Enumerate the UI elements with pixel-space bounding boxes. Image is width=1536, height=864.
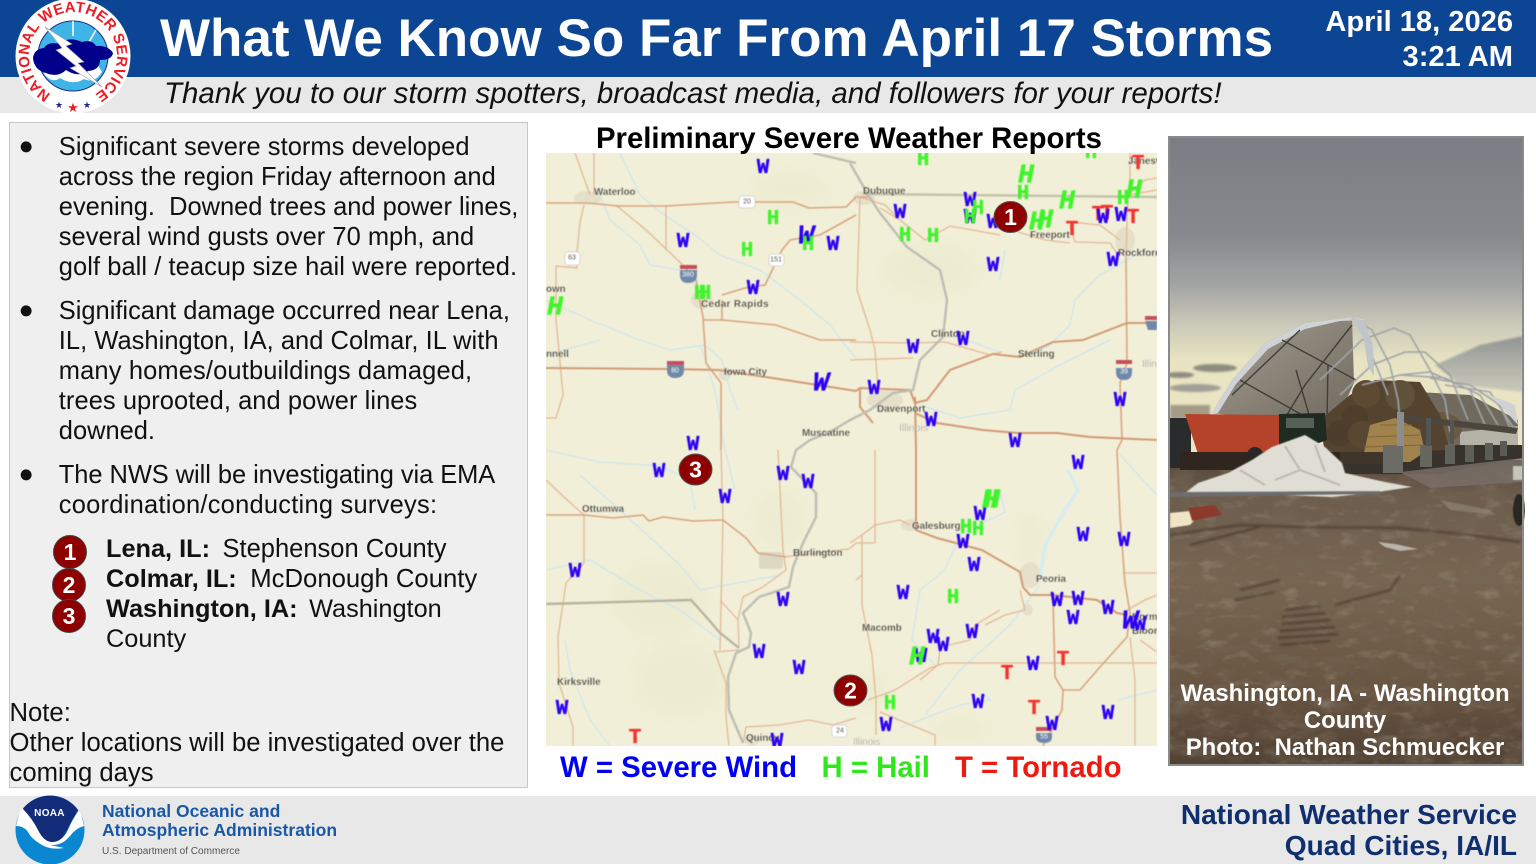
hail reports: H xyxy=(984,486,1001,516)
office name: National Weather Service xyxy=(1181,798,1517,830)
text: storm overview: golf ball / teacup size hail were reported. xyxy=(59,253,517,281)
wind reports: W xyxy=(1107,250,1120,273)
text: significant damage: downed. xyxy=(59,417,155,445)
survey marker 2: Colmar xyxy=(834,675,867,706)
wind reports: W xyxy=(1009,431,1022,454)
wind reports: W xyxy=(793,658,806,681)
map road shield labels: 24 xyxy=(836,728,844,734)
city labels: own xyxy=(546,284,566,295)
wind reports: W xyxy=(1077,525,1090,548)
icon: National Weather Service logo: ★ xyxy=(83,101,91,111)
map road shield labels: 380 xyxy=(682,272,694,278)
icon: NOAA logo: NOAA xyxy=(34,808,65,819)
wind reports xyxy=(556,157,1147,754)
hail reports: H xyxy=(972,519,984,542)
wind reports: W xyxy=(1114,390,1127,413)
wind reports drawn over tornado markers xyxy=(1097,205,1128,230)
barn base shadow xyxy=(1340,445,1523,474)
wind reports: W xyxy=(677,231,690,254)
map heading: Preliminary Severe Weather Reports xyxy=(596,122,1102,155)
wind reports: W xyxy=(1122,608,1141,638)
hail reports: H xyxy=(927,226,939,249)
text: significant damage: IL, Washington, IA, and Colmar, IL with xyxy=(59,327,499,355)
wind reports: W xyxy=(925,410,938,433)
photo caption: Washington, IA - Washington xyxy=(1180,680,1510,707)
wind reports: W xyxy=(868,378,881,401)
icon: National Weather Service logo: NATIONAL WEATHER SERVICE xyxy=(18,2,128,102)
icon: National Weather Service logo: ★ xyxy=(55,101,63,111)
bullet 3: ● xyxy=(18,460,34,488)
tornado reports: T xyxy=(1066,219,1078,242)
panel: key points: 3 xyxy=(62,602,75,628)
wind reports: W xyxy=(915,646,928,669)
wind reports: W xyxy=(897,583,910,606)
date and time: April 18, 2026 xyxy=(1325,6,1513,38)
hail reports: H xyxy=(960,517,972,540)
city labels: Quincy xyxy=(746,733,780,744)
panel: key points: 1 xyxy=(63,538,76,564)
photo: damaged hay barn in Washington County xyxy=(1168,136,1525,766)
wind reports: W xyxy=(747,278,760,301)
city labels: Waterloo xyxy=(594,187,636,198)
wind reports: W xyxy=(972,692,985,715)
sky clouds xyxy=(1166,336,1523,392)
office name: Quad Cities, IA/IL xyxy=(1285,830,1517,860)
city labels: Illin xyxy=(1142,359,1157,370)
city labels xyxy=(546,156,1164,748)
wind reports: W xyxy=(1102,598,1115,621)
note xyxy=(10,699,504,787)
barn rail and concrete bases xyxy=(1340,412,1518,473)
text: investigation: The NWS will be investigating via EMA xyxy=(59,461,495,489)
survey marker 3: Washington: 3 xyxy=(689,456,702,482)
city labels: Cedar Rapids xyxy=(701,299,769,310)
wind reports drawn over tornado markers: W xyxy=(1115,205,1128,228)
map road shield labels: 20 xyxy=(743,198,751,206)
hail reports: H xyxy=(1029,208,1046,238)
wind reports: W xyxy=(894,202,907,225)
tornado reports xyxy=(629,153,1144,750)
hail reports: H xyxy=(1117,188,1129,211)
wind reports: W xyxy=(927,627,940,650)
map road shield labels: 55 xyxy=(1040,734,1048,740)
wind reports: W xyxy=(1134,614,1147,637)
hail reports xyxy=(547,142,1143,716)
hail reports: H xyxy=(947,587,959,610)
NOAA agency name xyxy=(102,800,337,840)
wind reports: W xyxy=(1102,703,1115,726)
hail reports: H xyxy=(884,693,896,716)
text: storm overview: across the region Friday afternoon and xyxy=(59,163,496,191)
map road shield labels xyxy=(568,198,1128,740)
text: storm overview: evening. Downed trees and power lines, xyxy=(59,193,518,221)
survey marker 2: Colmar: 2 xyxy=(844,678,857,704)
panel: key points xyxy=(9,122,528,788)
survey list: County xyxy=(106,625,186,653)
wind reports: W xyxy=(966,622,979,645)
city labels: Sterling xyxy=(1018,349,1054,360)
map legend: W = Severe Wind H = Hail T = Tornado xyxy=(560,751,1122,784)
wind reports: W xyxy=(987,212,1000,235)
map road shield labels: 151 xyxy=(770,256,782,264)
wind reports: W xyxy=(987,255,1000,278)
text: storm overview xyxy=(59,133,518,281)
puddles and wheel xyxy=(1170,466,1525,551)
tornado reports: T xyxy=(1101,203,1113,226)
wind reports: W xyxy=(827,234,840,257)
wind reports: W xyxy=(1067,608,1080,631)
far-end fabric xyxy=(1485,393,1518,425)
footer band xyxy=(0,796,1536,864)
barn fabric panel xyxy=(1212,317,1354,425)
wind reports: W xyxy=(880,715,893,738)
wind reports: W xyxy=(1072,589,1085,612)
wind reports: W xyxy=(957,532,970,555)
city labels: Burlington xyxy=(793,548,843,559)
survey marker 3: Washington xyxy=(679,454,712,485)
city labels: Illinois xyxy=(899,422,928,434)
note: Other locations will be investigated over the xyxy=(10,729,504,757)
wind reports: W xyxy=(777,464,790,487)
wind reports: W xyxy=(687,434,700,457)
minor roads xyxy=(546,153,1157,746)
treeline xyxy=(1170,405,1210,419)
note: Note: xyxy=(10,699,71,727)
survey list xyxy=(106,535,478,653)
wind reports: W xyxy=(556,698,569,721)
ground xyxy=(1169,460,1523,764)
bullet 1: ● xyxy=(18,132,34,160)
department of commerce line: U.S. Department of Commerce xyxy=(102,846,240,856)
hail reports: H xyxy=(1126,176,1143,206)
text: significant damage xyxy=(59,297,510,445)
map road shield labels: 63 xyxy=(568,254,576,262)
subtitle: Thank you to our storm spotters, broadcast media, and followers for your reports! xyxy=(164,77,1222,110)
photo caption: County xyxy=(1304,707,1386,734)
title: What We Know So Far From April 17 Storms xyxy=(160,9,1273,68)
header band xyxy=(0,0,1536,77)
city labels: Clinton xyxy=(931,329,965,340)
icon: NOAA logo xyxy=(16,796,84,864)
date and time xyxy=(1325,6,1513,73)
urban areas xyxy=(574,191,1135,746)
survey number markers xyxy=(52,535,87,633)
wind reports: W xyxy=(937,635,950,658)
city labels: Freeport xyxy=(1030,230,1070,241)
interstate shields xyxy=(667,265,1157,743)
survey marker 1: Lena: 1 xyxy=(1004,204,1017,230)
office name xyxy=(1181,798,1517,860)
hail reports: H xyxy=(547,294,564,324)
text: storm overview: Significant severe storms developed xyxy=(59,133,470,161)
tire tracks xyxy=(1170,525,1520,645)
wind reports: W xyxy=(968,555,981,578)
wind reports: W xyxy=(974,504,987,527)
wind reports: W xyxy=(777,590,790,613)
wind reports: W xyxy=(569,561,582,584)
city labels: Ottumwa xyxy=(582,504,624,515)
wind reports: W xyxy=(802,472,815,495)
hail reports: H xyxy=(699,283,711,306)
hail reports: H xyxy=(802,234,814,257)
survey list: Lena, IL: Stephenson County xyxy=(106,535,447,563)
hail reports: H xyxy=(1059,188,1076,218)
text: significant damage: Significant damage occurred near Lena, xyxy=(59,297,510,325)
wind reports: W xyxy=(957,329,970,352)
tornado reports: T xyxy=(1057,649,1069,672)
map road shield labels: 39 xyxy=(1120,368,1128,376)
photo caption xyxy=(1180,680,1510,761)
hail reports: H xyxy=(767,208,779,231)
hay bales xyxy=(1320,380,1450,462)
tornado reports: T xyxy=(1127,207,1139,230)
hail reports: H xyxy=(982,486,999,516)
text: significant damage: many homes/outbuildings damaged, xyxy=(59,357,472,385)
wind reports: W xyxy=(1051,590,1064,613)
wind reports: W xyxy=(1046,714,1059,737)
wind reports: W xyxy=(1118,530,1131,553)
tornado reports: T xyxy=(1028,698,1040,721)
red feed wagon and tractor xyxy=(1169,413,1340,470)
wind reports: W xyxy=(1072,453,1085,476)
NOAA agency name: Atmospheric Administration xyxy=(102,820,337,840)
bullet 2: ● xyxy=(18,296,34,324)
city labels: Davenport xyxy=(877,404,926,415)
panel: key points: 2 xyxy=(62,572,75,598)
city labels: Kirksville xyxy=(557,677,601,688)
city labels: nnell xyxy=(546,349,569,360)
text: storm overview: several wind gusts over 70 mph, and xyxy=(59,223,474,251)
city labels: Galesburg xyxy=(912,521,960,532)
hail reports: H xyxy=(1037,206,1054,236)
hail reports: H xyxy=(1018,162,1035,192)
tornado reports: T xyxy=(1001,663,1013,686)
survey marker 1: Lena xyxy=(994,202,1027,232)
chart: severe weather report map xyxy=(546,153,1484,746)
wind reports drawn over tornado markers: W xyxy=(1097,207,1110,230)
text: investigation: coordination/conducting surveys: xyxy=(59,491,437,519)
text: significant damage: trees uprooted, and power lines xyxy=(59,387,417,415)
city labels: Dubuque xyxy=(863,186,906,197)
NOAA agency name: National Oceanic and xyxy=(102,800,280,820)
wind reports: W xyxy=(719,487,732,510)
hail reports: H xyxy=(972,198,984,221)
hail reports: H xyxy=(741,240,753,263)
city labels: Muscatine xyxy=(802,428,850,439)
city labels: Iowa City xyxy=(724,367,768,378)
wind reports: W xyxy=(964,190,977,213)
wind reports: W xyxy=(813,370,832,400)
date and time: 3:21 AM xyxy=(1403,41,1513,73)
note: coming days xyxy=(10,759,154,787)
Mississippi river and state borders xyxy=(546,153,1157,743)
hail reports: H xyxy=(964,207,976,230)
torn fabric strip xyxy=(1352,317,1374,376)
survey list: Colmar, IL: McDonough County xyxy=(106,565,477,593)
barn steel frame xyxy=(1320,318,1515,440)
hail reports: H xyxy=(694,283,706,306)
map road shield labels: 80 xyxy=(671,368,679,374)
survey list: Washington, IA: Washington xyxy=(106,595,442,623)
wind reports: W xyxy=(1027,654,1040,677)
major roads xyxy=(546,197,1130,746)
wind reports: W xyxy=(753,642,766,665)
white tarp pile xyxy=(1170,435,1412,497)
wind reports: W xyxy=(653,461,666,484)
city labels: Peoria xyxy=(1036,574,1067,585)
wind reports: W xyxy=(907,337,920,360)
far barn interior xyxy=(1418,392,1518,446)
tornado reports: T xyxy=(1092,204,1104,227)
wind reports: W xyxy=(757,157,770,180)
subheader band xyxy=(0,77,1536,113)
photo caption: Photo: Nathan Schmuecker xyxy=(1186,734,1504,761)
city labels: Macomb xyxy=(862,623,902,634)
photo frame xyxy=(1169,137,1523,765)
rivers xyxy=(546,153,1157,746)
hail reports: H xyxy=(909,644,926,674)
wind reports: W xyxy=(964,207,977,230)
text: investigation xyxy=(59,461,496,519)
hail reports: H xyxy=(1017,183,1029,206)
wind reports: W xyxy=(798,222,817,252)
hail reports: H xyxy=(899,225,911,248)
tornado reports: T xyxy=(1132,153,1144,176)
